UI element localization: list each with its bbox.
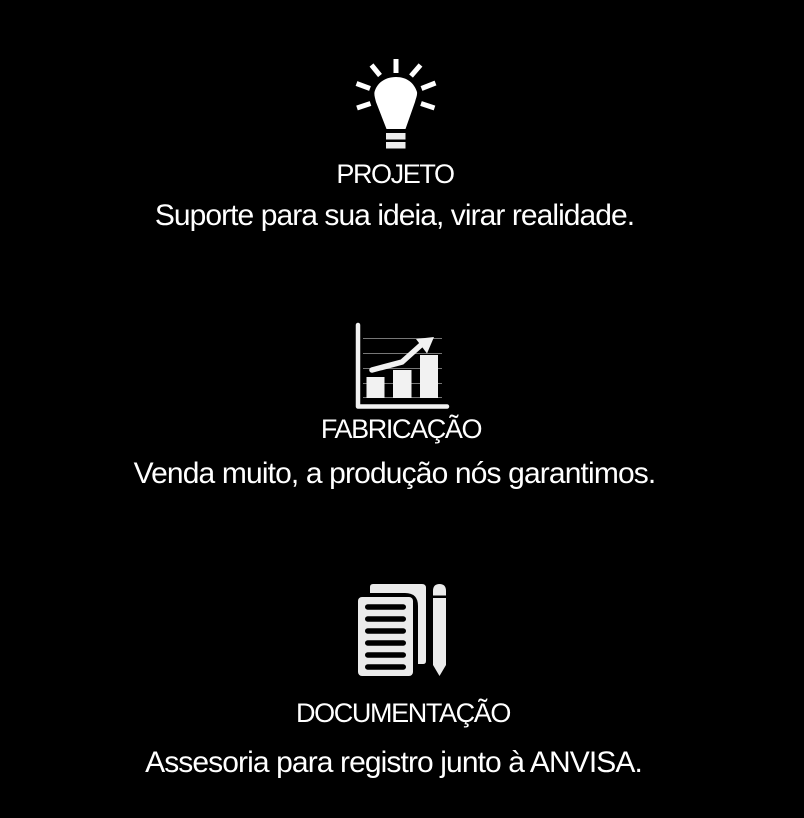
- icon: bar chart with rising arrow: [356, 322, 450, 409]
- text: fabricação description: Venda muito, a produção nós garantimos.: [134, 457, 655, 490]
- heading: projeto: PROJETO: [336, 159, 454, 189]
- icon: documents and pencil: [358, 584, 446, 676]
- icon: light bulb: [356, 59, 436, 148]
- text: projeto description: Suporte para sua ideia, virar realidade.: [155, 199, 634, 232]
- heading: fabricação: FABRICAÇÃO: [321, 414, 481, 444]
- text: documentação description: Assesoria para registro junto à ANVISA.: [145, 746, 642, 779]
- heading: documentação: DOCUMENTAÇÃO: [296, 698, 510, 728]
